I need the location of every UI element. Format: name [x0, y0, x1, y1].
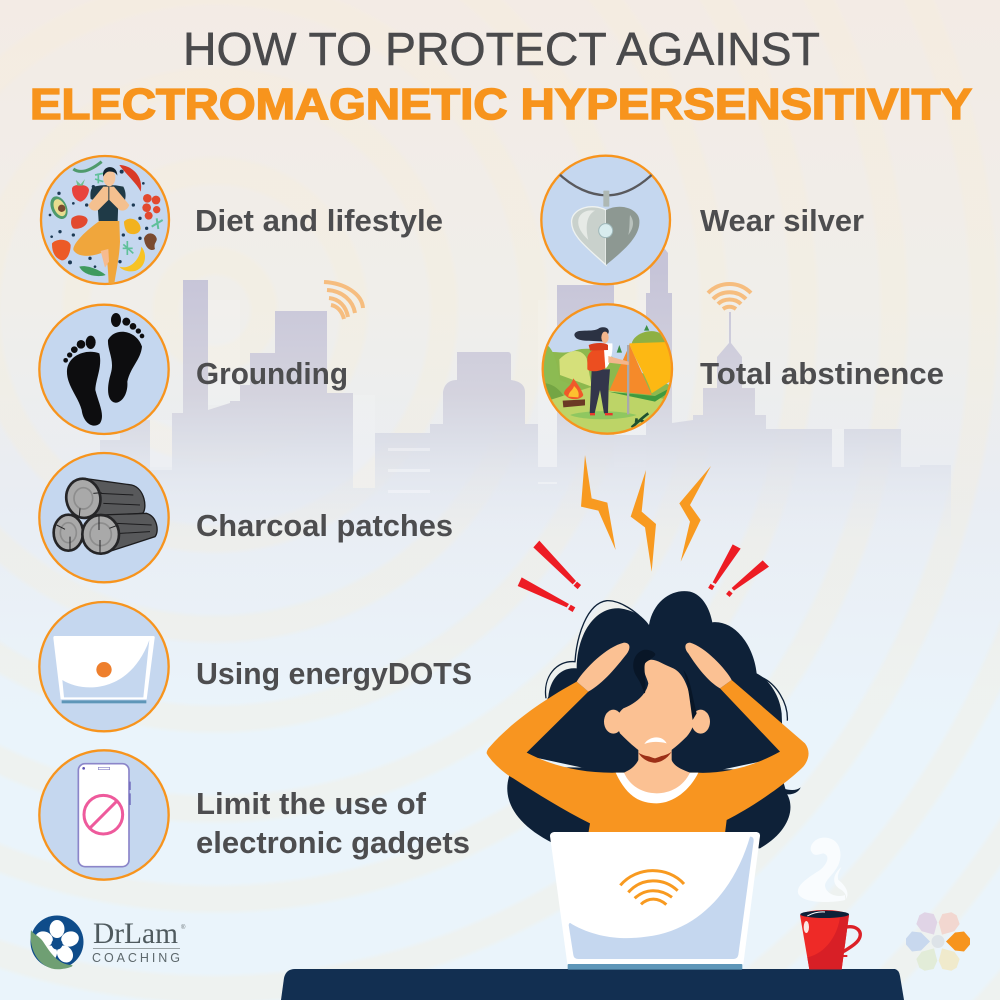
item: wear silver: [541, 156, 864, 284]
item: charcoal patches: [39, 453, 453, 582]
label: Total abstinence: [700, 356, 944, 391]
DrLam Coaching logo: [30, 916, 186, 969]
icon: silver heart pendant: [541, 156, 670, 284]
label: Diet and lifestyle: [195, 203, 443, 238]
registered mark: ®: [181, 924, 186, 931]
item: grounding: [39, 305, 348, 434]
campfire: [563, 399, 585, 407]
icon: logs: [39, 453, 169, 582]
hands: [577, 643, 732, 692]
label: Using energyDOTS: [196, 656, 472, 691]
pale background buildings: [150, 300, 844, 488]
icon: footprints: [39, 305, 169, 434]
logo divider: [93, 948, 180, 949]
lightning bolts: [581, 455, 711, 572]
label: Grounding: [196, 356, 348, 391]
icon: laptop with dot: [39, 602, 169, 731]
laptop: [550, 832, 760, 970]
icon: camping woman: [540, 304, 673, 440]
desk: [281, 969, 904, 1000]
signal icon: left skyline: [324, 282, 363, 319]
orange sweater: [487, 680, 809, 833]
sweater collar: [616, 773, 698, 803]
skyline window lines: [388, 448, 557, 493]
title: [30, 23, 972, 129]
title line 1: HOW TO PROTECT AGAINST: [183, 23, 820, 75]
flower emblem: [906, 909, 970, 974]
plant: [632, 413, 648, 427]
hair: [507, 591, 801, 848]
logo mark: [30, 916, 84, 969]
stressed woman illustration: [487, 455, 809, 848]
signal icon: right skyline: [708, 284, 751, 309]
title line 2: ELECTROMAGNETIC HYPERSENSITIVITY: [30, 80, 972, 129]
icon: diet and yoga: [41, 156, 169, 286]
item: total abstinence: [540, 304, 944, 440]
food: [50, 196, 68, 219]
neck and face: [604, 650, 710, 793]
icon: phone with ban sign: [39, 750, 169, 880]
person: [73, 221, 120, 286]
item: diet and lifestyle: [41, 156, 443, 286]
steam: [798, 838, 847, 902]
item: using energyDOTS: [39, 602, 472, 731]
label: Limit the use of: [196, 786, 427, 821]
label: Wear silver: [700, 203, 864, 238]
item: limit electronic gadgets: [39, 750, 470, 880]
logo subline: COACHING: [92, 951, 180, 965]
city skyline silhouette: [100, 240, 951, 560]
label: Charcoal patches: [196, 508, 453, 543]
exclamation marks: [518, 541, 769, 612]
label: electronic gadgets: [196, 825, 470, 860]
coffee cup with steam: [798, 838, 860, 969]
woman: [574, 327, 609, 342]
wifi icon: [620, 871, 684, 905]
logo wordmark: DrLam: [93, 917, 178, 950]
label: [196, 786, 470, 860]
